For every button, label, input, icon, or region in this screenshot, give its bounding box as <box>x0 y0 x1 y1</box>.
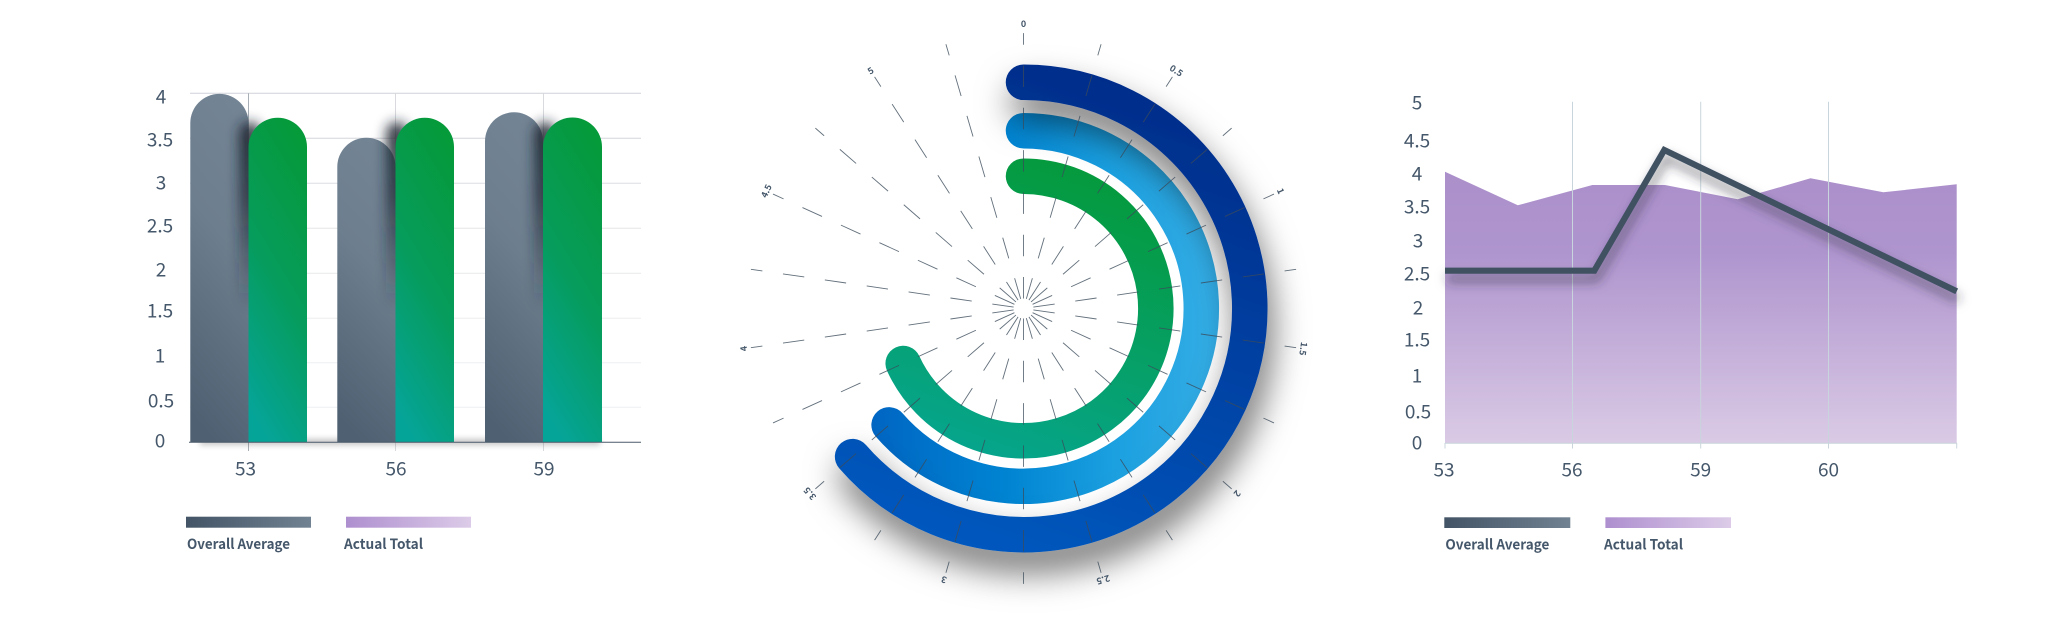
ring: inner green <box>903 176 1156 441</box>
radial labels <box>736 17 1311 588</box>
x axis labels: 60 <box>1818 456 1839 482</box>
bars: group 53 <box>190 94 307 442</box>
y axis labels <box>147 82 174 454</box>
y axis labels: 1.5 <box>147 296 173 324</box>
y axis labels: 2.5 <box>1404 260 1430 286</box>
radial labels: 4 <box>736 345 750 352</box>
radial labels: 4.5 <box>757 182 775 200</box>
ring: middle blue <box>889 131 1201 486</box>
y axis labels: 4 <box>1412 160 1422 186</box>
legend: Overall Average <box>1445 534 1549 554</box>
y axis labels: 2 <box>1413 294 1423 320</box>
vertical grid lines <box>1445 102 1957 448</box>
x axis labels: 59 <box>533 454 555 482</box>
radial spokes <box>751 33 1296 584</box>
radial labels: 1.5 <box>1296 341 1311 356</box>
ring: outer navy <box>853 82 1250 535</box>
radial labels: 5 <box>865 64 876 77</box>
y axis labels: 0 <box>155 426 165 454</box>
panel: area and line chart <box>1404 88 1957 554</box>
bars: group 59 <box>485 112 602 442</box>
legend: Actual Total <box>343 534 424 554</box>
y axis labels: 3.5 <box>1404 192 1430 220</box>
panel: radial bar chart <box>736 17 1311 588</box>
y axis labels: 0.5 <box>1405 398 1431 424</box>
y axis labels: 1 <box>1412 362 1422 388</box>
radial labels: 2 <box>1231 488 1244 500</box>
radial labels: 0 <box>1021 17 1026 30</box>
y axis labels: 3.5 <box>147 126 173 152</box>
radial labels: 0.5 <box>1167 61 1186 80</box>
x axis labels: 59 <box>1690 456 1711 482</box>
legend: Actual Total <box>1603 534 1684 554</box>
x axis labels <box>1433 456 1839 482</box>
y axis labels: 3 <box>156 168 166 196</box>
y axis labels: 4.5 <box>1404 126 1430 154</box>
y axis labels: 2 <box>156 256 166 282</box>
radial labels: 3.5 <box>800 484 819 503</box>
y axis labels: 2.5 <box>147 212 173 238</box>
x axis labels: 56 <box>1561 456 1583 482</box>
grid lines <box>190 93 641 451</box>
y axis labels: 1.5 <box>1404 326 1430 352</box>
y axis labels: 0.5 <box>148 386 174 414</box>
purple area <box>1445 172 1957 443</box>
y axis labels: 4 <box>156 82 166 110</box>
radial labels: 3 <box>939 573 948 587</box>
y axis labels: 5 <box>1412 88 1422 116</box>
panel: bar chart <box>147 82 641 554</box>
shadow under baseline <box>200 439 600 445</box>
legend <box>186 517 471 554</box>
legend: Overall Average <box>187 534 290 554</box>
radial labels: 1 <box>1274 186 1288 196</box>
x axis labels: 56 <box>385 454 407 482</box>
x axis labels <box>235 454 555 482</box>
overall average line <box>1445 150 1957 291</box>
legend <box>1444 517 1731 554</box>
x axis labels: 53 <box>235 454 256 482</box>
y axis labels: 1 <box>155 342 165 368</box>
baseline <box>189 441 641 443</box>
y axis labels <box>1404 88 1431 456</box>
bars: group 56 <box>337 118 454 442</box>
y axis labels: 0 <box>1412 428 1422 456</box>
y axis labels: 3 <box>1413 226 1423 254</box>
x axis labels: 53 <box>1433 456 1455 482</box>
radial labels: 2.5 <box>1095 572 1112 588</box>
